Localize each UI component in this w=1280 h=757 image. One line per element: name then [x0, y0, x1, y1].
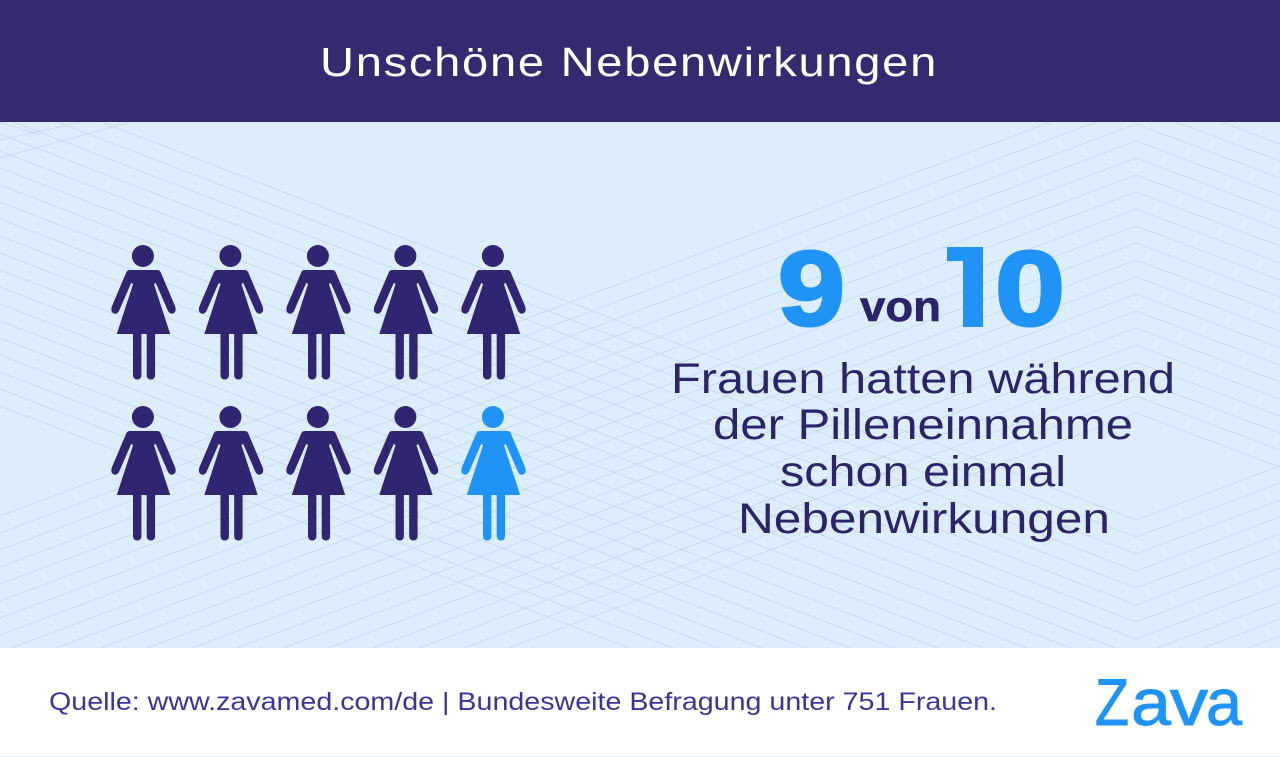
logo: Zava: Z	[1095, 665, 1129, 739]
icon: woman 10 highlighted	[461, 406, 526, 540]
logo: Zava: a	[1131, 665, 1171, 739]
icon: woman 1	[111, 245, 176, 380]
text block: description	[671, 355, 1175, 543]
icon: woman 6	[111, 406, 176, 540]
logo: Zava: a	[1206, 665, 1242, 739]
icon: woman 3	[286, 245, 351, 380]
icon: woman 8	[286, 406, 351, 540]
text block: description: Frauen hatten während	[671, 355, 1175, 403]
footer source line: Quelle: www.zavamed.com/de | Bundesweite Befragung unter 751 Frauen.	[49, 688, 997, 716]
statistic: 9 von 10: 0	[995, 230, 1065, 348]
icon: woman 2	[199, 245, 263, 380]
pictogram: 9 of 10 women	[111, 245, 526, 540]
text block: description: Nebenwirkungen	[738, 495, 1110, 543]
logo: Zava: v	[1170, 665, 1208, 739]
header band	[0, 0, 1280, 122]
icon: woman 9	[374, 406, 438, 540]
statistic: 9 von 10	[780, 247, 1062, 328]
statistic: 9 von 10: von	[860, 283, 941, 331]
text block: description: schon einmal	[780, 448, 1066, 496]
statistic: 9 von 10: 1	[945, 233, 983, 349]
icon: woman 5	[461, 245, 526, 380]
panel: light blue background with line pattern	[0, 83, 1280, 648]
title: Unschöne Nebenwirkungen	[320, 39, 938, 85]
bottom edge line	[0, 756, 1280, 757]
statistic: 9 von 10: 9	[778, 230, 845, 348]
icon: woman 7	[199, 406, 263, 540]
icon: woman 4	[374, 245, 438, 380]
text block: description: der Pilleneinnahme	[713, 401, 1133, 449]
